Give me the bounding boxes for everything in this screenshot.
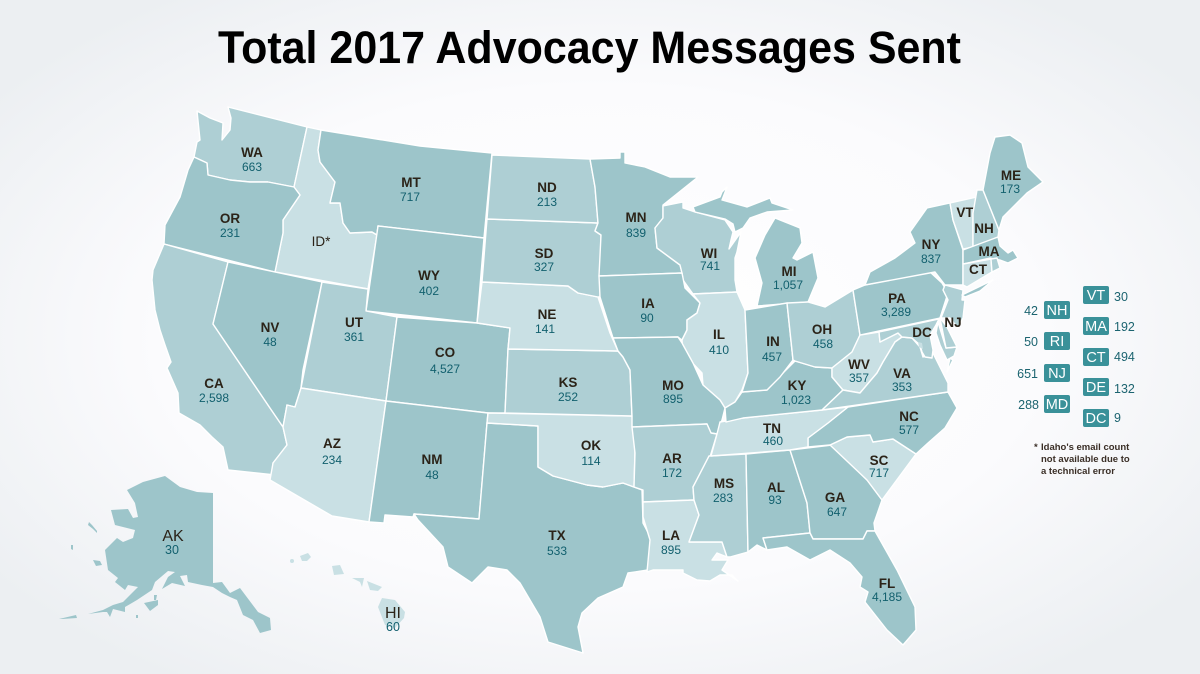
state: MO — [613, 337, 725, 434]
state: WI: 741 — [700, 259, 720, 273]
state: AL: AL — [767, 480, 785, 495]
state: SC: SC — [870, 453, 889, 468]
state: NM — [369, 401, 488, 523]
legend item: RI: RI — [1050, 334, 1064, 350]
state: CA: CA — [204, 376, 224, 391]
state: VT — [950, 197, 977, 249]
state: GA: GA — [825, 490, 845, 505]
legend item: NJ: NJ — [1048, 366, 1066, 382]
state: ME — [983, 135, 1043, 230]
state: OR — [164, 157, 300, 272]
state: ME: 173 — [1000, 182, 1020, 196]
state: SD: 327 — [534, 260, 554, 274]
state: CO: 4,527 — [430, 362, 460, 376]
state: IN — [742, 303, 793, 392]
state: NV — [213, 262, 322, 427]
state: GA — [790, 445, 882, 539]
state: NH: NH — [974, 221, 994, 236]
map of United States — [59, 107, 1043, 653]
state: MD — [879, 319, 957, 360]
state: SC: 717 — [869, 466, 889, 480]
state: MN: 839 — [626, 226, 646, 240]
state: OR: 231 — [220, 226, 240, 240]
state: OK: OK — [581, 438, 601, 453]
state: MS — [689, 454, 748, 557]
state: MT: MT — [401, 175, 421, 190]
state: NH — [973, 190, 999, 247]
state: KY: KY — [788, 378, 806, 393]
legend item: NH: NH — [1047, 303, 1067, 319]
state: FL — [763, 531, 916, 645]
legend item: NJ — [1017, 364, 1070, 382]
state: ID: ID* — [312, 234, 331, 249]
state: NC: NC — [899, 409, 919, 424]
state: IA: 90 — [640, 311, 654, 325]
state: FL: 4,185 — [872, 590, 902, 604]
state: NM: 48 — [425, 468, 439, 482]
legend item: NH — [1024, 301, 1070, 319]
footnote: * — [1034, 442, 1038, 453]
state: WA: 663 — [242, 160, 262, 174]
legend item: CT: CT — [1086, 350, 1106, 366]
state: MI — [693, 187, 818, 306]
state: MA: MA — [978, 244, 1000, 259]
state: PA — [853, 272, 948, 335]
footnote: a technical error — [1041, 466, 1115, 477]
legend item: VT — [1083, 286, 1128, 304]
state: NC — [808, 392, 957, 454]
legend item: DC: 9 — [1114, 411, 1121, 425]
state: IN: 457 — [762, 350, 782, 364]
state: WV — [832, 332, 902, 393]
state: OR: OR — [220, 211, 240, 226]
state: RI — [991, 258, 1000, 272]
state: HI: 60 — [386, 620, 400, 634]
state: KS — [505, 349, 632, 416]
state: WY: WY — [418, 268, 440, 283]
title: Total 2017 Advocacy Messages Sent — [218, 22, 961, 73]
state: NE: 141 — [535, 322, 555, 336]
state: SC — [830, 435, 916, 500]
state: LA: LA — [662, 528, 680, 543]
state: UT: 361 — [344, 330, 364, 344]
state: MS: MS — [714, 476, 734, 491]
legend item: RI: 50 — [1024, 335, 1038, 349]
state: ID — [275, 127, 377, 289]
legend item: NH: 42 — [1024, 304, 1038, 318]
state: MI: MI — [782, 264, 796, 279]
legend item: MA: MA — [1085, 319, 1107, 335]
state: CO — [386, 317, 510, 413]
state: VA: VA — [893, 366, 911, 381]
state: MI: 1,057 — [773, 278, 803, 292]
state: NC: 577 — [899, 423, 919, 437]
state: HI — [290, 553, 405, 634]
state: CA — [152, 244, 287, 475]
state: AZ — [270, 388, 386, 522]
state: MN — [590, 152, 698, 276]
state: LA: 895 — [661, 543, 681, 557]
state: FL: FL — [879, 576, 895, 591]
legend: small states — [1017, 286, 1135, 427]
state: AK: AK — [162, 528, 184, 545]
state: CT — [963, 259, 992, 287]
state: OK — [487, 413, 635, 487]
legend item: MD — [1018, 395, 1070, 413]
state: IN: IN — [766, 334, 780, 349]
state: KY: 1,023 — [781, 393, 811, 407]
state: KS: 252 — [558, 390, 578, 404]
state: IL: IL — [713, 327, 725, 342]
state: WA: WA — [241, 145, 263, 160]
state: OH — [787, 290, 860, 368]
state: AL — [746, 450, 810, 552]
state: VA — [822, 337, 953, 410]
state: IL: 410 — [709, 343, 729, 357]
state: NM: NM — [422, 452, 442, 467]
state: HI: HI — [385, 605, 401, 622]
state: NY: NY — [922, 237, 940, 252]
legend item: RI — [1024, 332, 1070, 350]
state: WY: 402 — [419, 284, 439, 298]
state: WV: 357 — [849, 371, 869, 385]
state: AR: AR — [662, 451, 682, 466]
footnote — [1034, 442, 1130, 477]
state: MT: 717 — [400, 190, 420, 204]
state: NV: 48 — [263, 335, 277, 349]
state: AK — [59, 476, 271, 633]
state: PA: PA — [888, 291, 906, 306]
state: ND: 213 — [537, 195, 557, 209]
state: ME: ME — [1001, 168, 1021, 183]
state: SD — [482, 219, 601, 297]
state: CO: CO — [435, 345, 455, 360]
state: IL — [682, 292, 748, 408]
state: MT — [318, 130, 492, 238]
legend item: MA: 192 — [1114, 320, 1135, 334]
legend item: CT: 494 — [1114, 350, 1135, 364]
footnote: not available due to — [1041, 454, 1130, 465]
state: MD: DC — [912, 325, 932, 340]
legend item: DE: DE — [1086, 380, 1106, 396]
state: NV: NV — [261, 320, 279, 335]
legend item: DC: DC — [1086, 411, 1106, 427]
state: KS: KS — [559, 375, 577, 390]
legend item: MD: 288 — [1018, 398, 1039, 412]
state: IA: IA — [641, 296, 655, 311]
state: GA: 647 — [827, 505, 847, 519]
state: OK: 114 — [581, 454, 601, 468]
state: OH: OH — [812, 322, 832, 337]
state: AK: 30 — [165, 543, 179, 557]
state: ND — [487, 155, 598, 223]
state: TX — [414, 423, 652, 653]
state: AZ: AZ — [323, 436, 341, 451]
state: NJ — [941, 285, 965, 330]
state: NY: 837 — [921, 252, 941, 266]
state: MA — [963, 237, 1018, 264]
footnote: Idaho's email count — [1041, 442, 1130, 453]
state: WV: WV — [848, 357, 870, 372]
state: WY — [366, 226, 484, 323]
state: WI — [655, 202, 741, 294]
legend item: MA — [1083, 317, 1135, 335]
state: CA: 2,598 — [199, 391, 229, 405]
state: TN: 460 — [763, 434, 783, 448]
state: WI: WI — [701, 246, 717, 261]
state: AL: 93 — [768, 493, 782, 507]
legend item: VT: 30 — [1114, 290, 1128, 304]
state: MO: 895 — [663, 392, 683, 406]
state: NE: NE — [538, 307, 556, 322]
legend item: DE — [1083, 378, 1135, 396]
state: TX: TX — [548, 528, 566, 543]
state: NE — [477, 282, 618, 351]
legend item: CT — [1083, 348, 1135, 366]
state: NY — [865, 203, 993, 297]
state: UT — [301, 282, 397, 401]
state: NJ: NJ — [944, 315, 962, 330]
state: CT: CT — [969, 262, 988, 277]
legend item: DE: 132 — [1114, 382, 1135, 396]
legend item: DC — [1083, 409, 1121, 427]
legend item: NJ: 651 — [1017, 367, 1038, 381]
state: IA — [599, 273, 700, 340]
state: WA — [194, 107, 307, 187]
legend item: MD: MD — [1046, 397, 1068, 413]
state: AR: 172 — [662, 466, 682, 480]
state: MO: MO — [662, 378, 684, 393]
state: AR — [632, 424, 717, 502]
state: UT: UT — [345, 315, 364, 330]
state: VT: VT — [956, 205, 974, 220]
state: SD: SD — [535, 246, 554, 261]
state: AZ: 234 — [322, 453, 342, 467]
state: TX: 533 — [547, 544, 567, 558]
state: MS: 283 — [713, 491, 733, 505]
state: ND: ND — [537, 180, 557, 195]
state: TN: TN — [763, 421, 781, 436]
state: LA — [643, 500, 738, 581]
state: DE — [940, 318, 957, 348]
state: MN: MN — [626, 210, 646, 225]
state: TN — [711, 407, 848, 456]
state: KY — [725, 361, 843, 422]
state: OH: 458 — [813, 337, 833, 351]
state: PA: 3,289 — [881, 305, 911, 319]
legend item: VT: VT — [1087, 288, 1105, 304]
state: VA: 353 — [892, 380, 912, 394]
